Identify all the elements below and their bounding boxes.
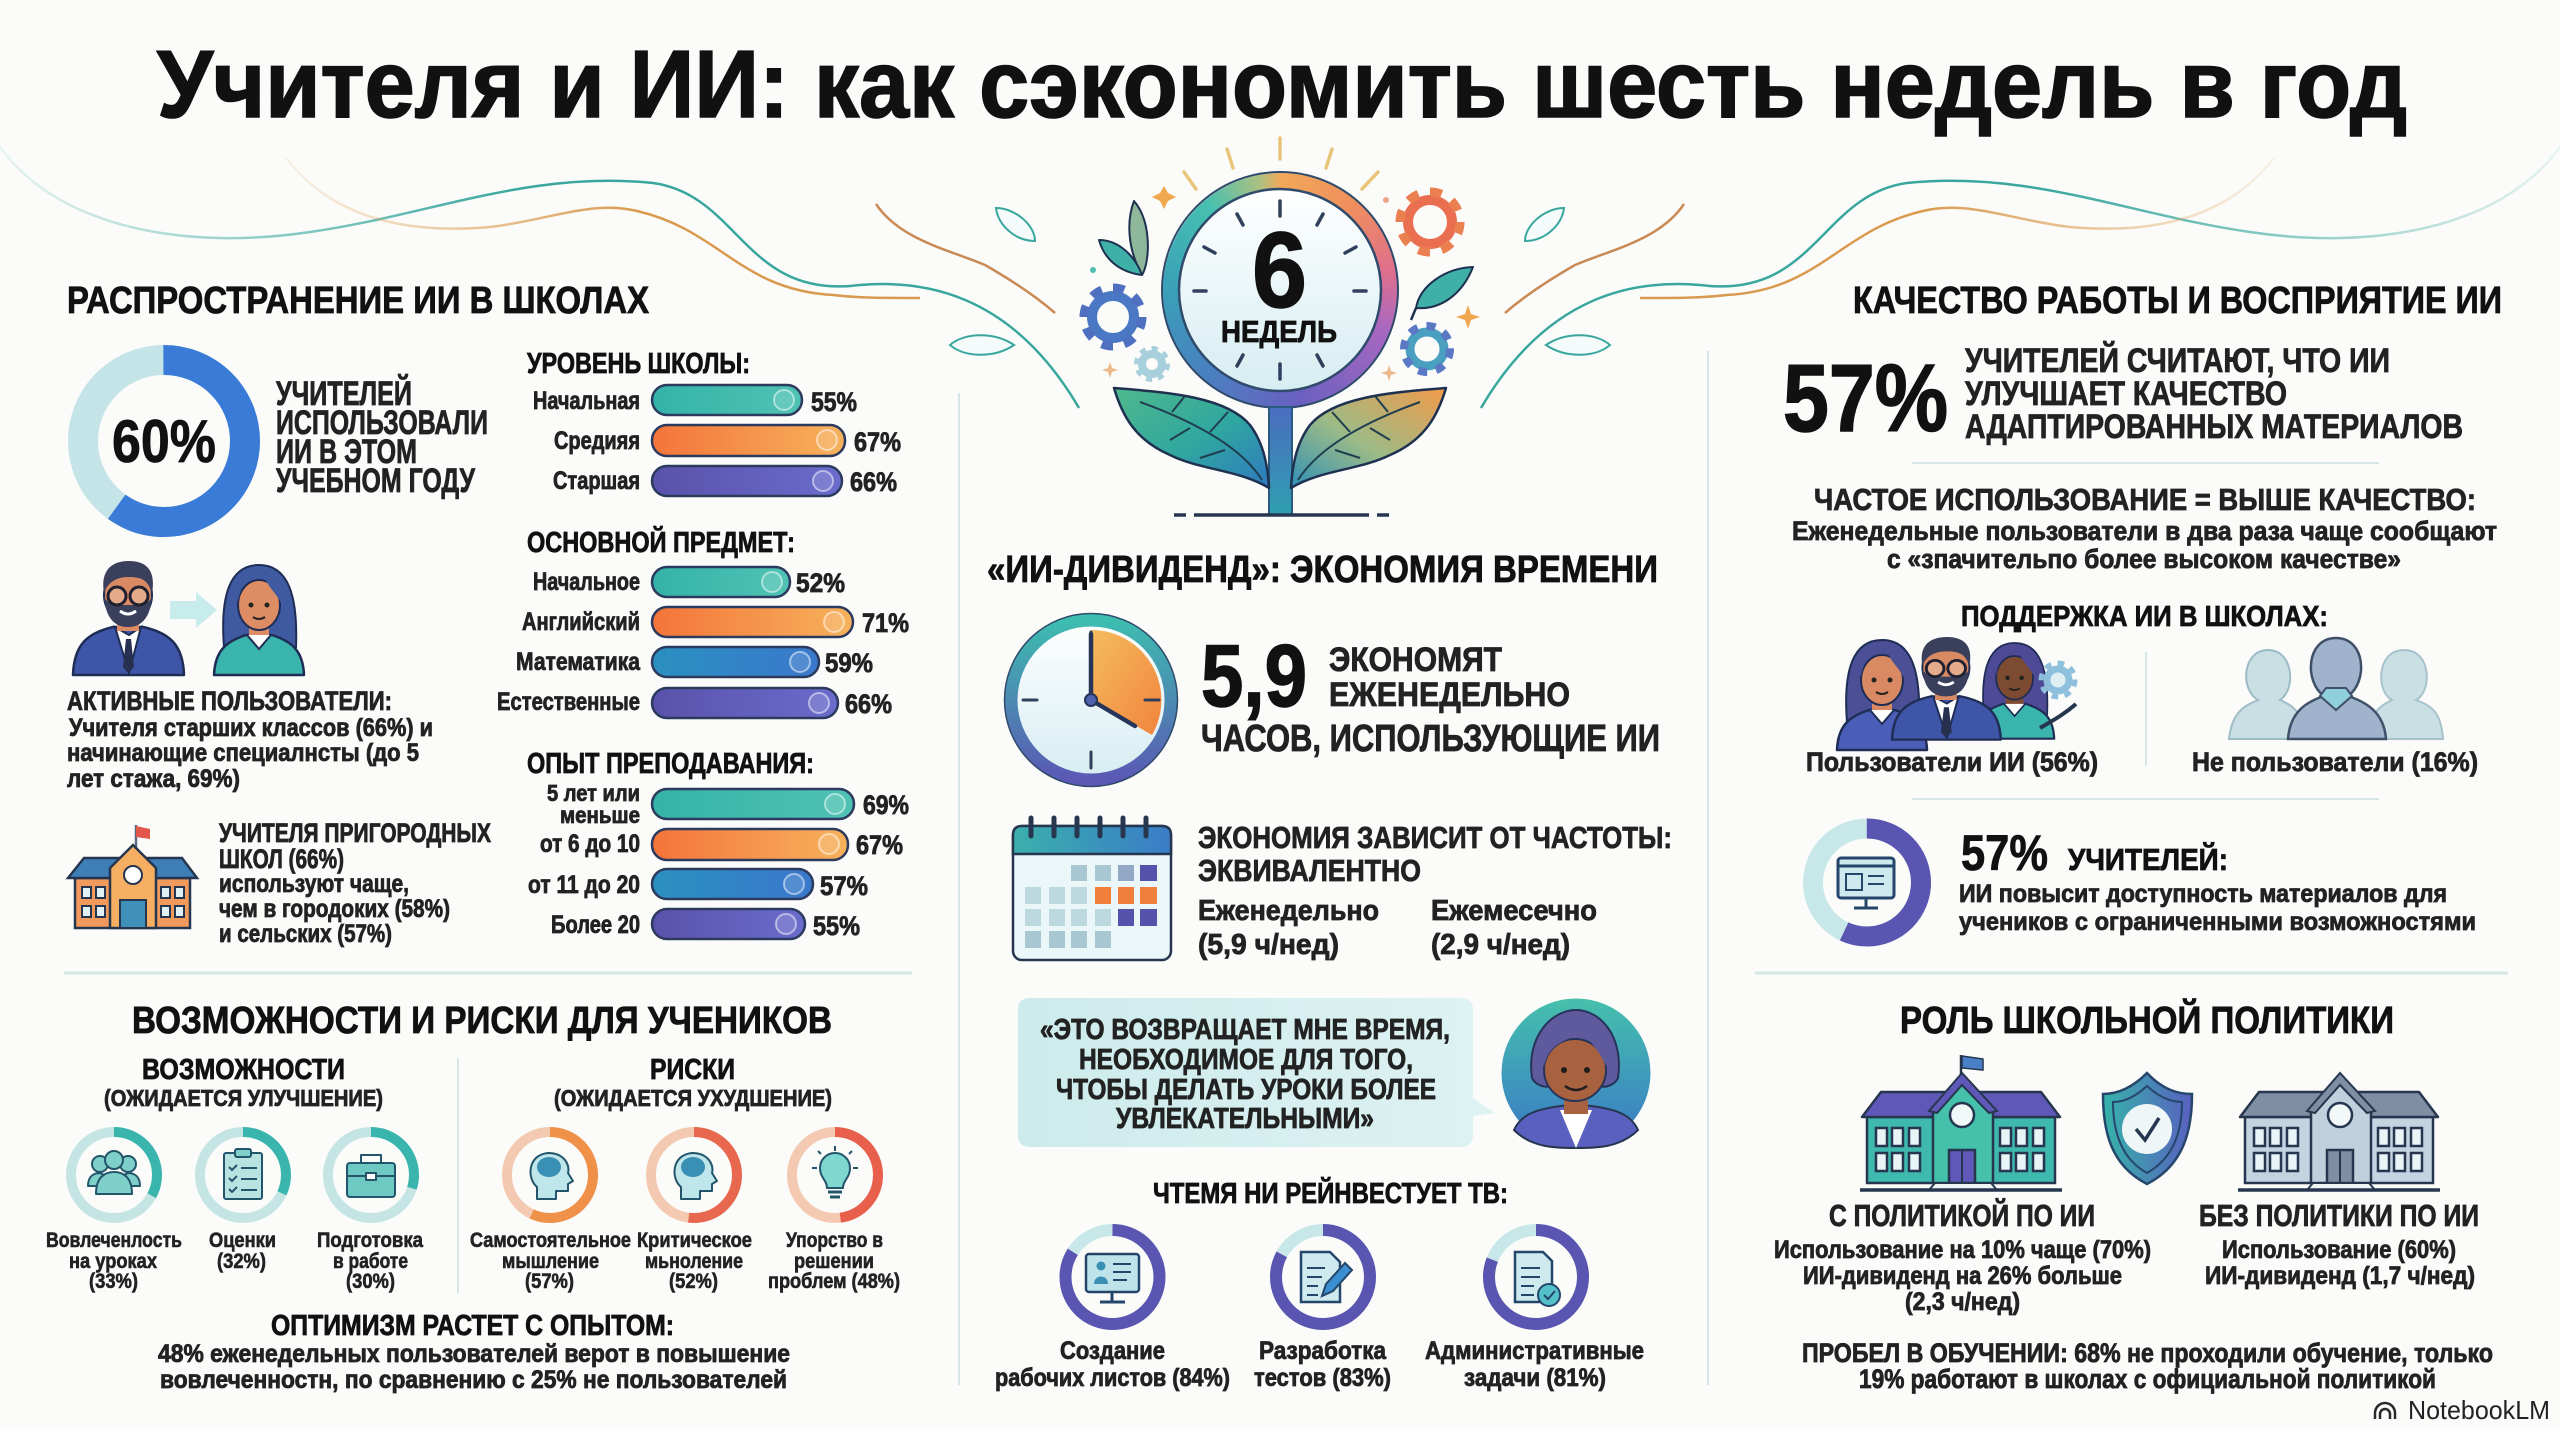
ring: упорство 48% [792,1132,878,1218]
text block: экономия зависит от частоты: ЭКВИВАЛЕНТНО [1198,853,1421,888]
heading: РОЛЬ ШКОЛЬНОЙ ПОЛИТИКИ [1900,997,2394,1042]
bar: начальное 52%: Начальное [533,568,640,596]
bar: средняя 67% [554,425,901,457]
panel: ИИ-дивиденд [987,549,1672,1392]
chart: уровень школы [527,348,901,497]
bar: математика 59%: 59% [825,648,873,678]
bar: средняя 67%: 67% [854,427,901,457]
clock ring [1163,173,1398,408]
text block: без политики [2199,1198,2479,1290]
callout: quote bubble [1018,998,1495,1147]
bar: старшая 66% [553,466,897,497]
panel: возможности и риски [46,1000,900,1394]
ring labels: тестов (83%) [1254,1364,1391,1392]
panel: качество работы и восприятие ИИ [1783,280,2502,936]
subheading: возможности [104,1054,383,1111]
icon labels: Пользователи ИИ (56%) [1806,747,2098,777]
ring labels: Критическое [637,1229,752,1252]
text block: без политики: БЕЗ ПОЛИТИКИ ПО ИИ [2199,1198,2479,1233]
callout: quote bubble: «ЭТО ВОЗВРАЩАЕТ МНЕ ВРЕМЯ, [1040,1014,1450,1046]
heading: РАСПРОСТРАНЕНИЕ ИИ В ШКОЛАХ [67,280,650,322]
bar: начальное 52% [533,567,845,598]
callout: quote bubble: УВЛЕКАТЕЛЬНЫМИ» [1116,1103,1374,1135]
subheading: риски: РИСКИ [650,1054,735,1086]
stat: 5,9 часов: ЧАСОВ, ИСПОЛЬЗУЮЩИЕ ИИ [1201,718,1660,760]
ring: критическое мышление 52% [651,1132,737,1218]
decorative waves left [0,147,1079,408]
chart: основной предмет: ОСНОВНОЙ ПРЕДМЕТ: [527,525,795,559]
heading: куда реинвестируют: ЧТЕМЯ НИ РЕЙНВЕСТУЕТ ТВ: [1153,1176,1508,1210]
ring: административные задачи 81% [1489,1230,1583,1324]
ring labels: Вовлеченлость [46,1229,182,1252]
ring labels: (32%) [217,1250,266,1273]
stat: 5,9 часов: ЭКОНОМЯТ [1329,641,1502,679]
bar: средняя 67%: Средияя [554,427,640,455]
text block: экономия зависит от частоты: (5,9 ч/нед) [1198,929,1339,961]
text block: экономия зависит от частоты: ЭКОНОМИЯ ЗАВИСИТ ОТ ЧАСТОТЫ: [1198,820,1672,855]
ring labels [46,1229,900,1293]
icon labels: Не пользователи (16%) [2192,747,2478,777]
icon: shield [2103,1073,2192,1184]
ring labels: (57%) [525,1270,574,1293]
ring labels [995,1337,1644,1392]
bar: старшая 66%: 66% [850,467,897,497]
ring: рабочие листы 84% [1066,1230,1160,1324]
text block: пригородные школы [219,818,491,948]
ring labels: в работе [333,1250,408,1273]
bar: от 6 до 10 67% [540,829,903,860]
text block: пробел в обучении [1802,1338,2493,1394]
heading: поддержка ИИ: ПОДДЕРЖКА ИИ В ШКОЛАХ: [1961,601,2328,633]
bar: начальная 55% [533,385,857,417]
icon: suburban school [68,825,197,928]
bar: от 11 до 20 57%: 57% [820,871,868,901]
subheading: возможности: (ОЖИДАЕТСЯ УЛУЧШЕНИЕ) [104,1085,383,1111]
bar: от 11 до 20 57% [528,869,868,901]
text block: экономия зависит от частоты: Еженедельно [1198,895,1379,927]
ring labels: на уроках [69,1250,157,1273]
ring labels: задачи (81%) [1464,1364,1606,1392]
ring labels: мышление [502,1250,599,1273]
stat: 5,9 часов [1201,626,1660,760]
text block: 57% учителей: УЧИТЕЛЕЙ: [2068,841,2228,877]
ring: доступность 57% [1813,828,1921,936]
bar: математика 59% [516,647,873,678]
text block: с политикой [1774,1197,2151,1316]
subheading: риски [554,1054,832,1111]
ring labels: мьноление [645,1250,743,1273]
text block: с политикой: ИИ-дивиденд на 26% больше [1803,1262,2122,1290]
text block: активные пользователи [67,686,433,793]
callout: quote bubble: ЧТОБЫ ДЕЛАТЬ УРОКИ БОЛЕЕ [1056,1074,1436,1106]
text block: 57% учителей: 57% [1961,825,2048,881]
text block: экономия зависит от частоты: (2,9 ч/нед) [1431,929,1570,961]
bar: 5 лет или меньше 69%: меньше [560,802,640,828]
text block: без политики: ИИ-дивиденд (1,7 ч/нед) [2205,1262,2475,1290]
ring labels: Административные [1425,1337,1644,1365]
text block: экономия зависит от частоты: Ежемесечно [1431,895,1597,927]
ring labels: проблем (48%) [768,1270,900,1293]
ring labels: Упорство в [786,1229,883,1252]
chart: уровень школы: УРОВЕНЬ ШКОЛЫ: [527,348,750,380]
bar: от 11 до 20 57%: от 11 до 20 [528,871,640,899]
ring: подготовка 30% [328,1132,414,1218]
text block: частое использование: Еженедельные пользователи в два раза чаще сообщают [1792,516,2497,546]
bar: начальная 55%: 55% [811,387,857,417]
bar: естественные 66% [497,688,892,719]
text block: активные пользователи: АКТИВНЫЕ ПОЛЬЗОВАТЕЛИ: [67,686,392,716]
stat caption [1965,341,2463,446]
text block: с политикой: С ПОЛИТИКОЙ ПО ИИ [1829,1197,2095,1233]
text block: частое использование [1792,482,2497,574]
ring labels: решении [794,1250,874,1273]
bar: начальное 52%: 52% [796,568,845,598]
bar: естественные 66%: 66% [845,689,892,719]
ring: тесты 83% [1276,1230,1370,1324]
logo: NotebookLM: NotebookLM [2408,1395,2550,1425]
bar: более 20 55%: Более 20 [551,911,640,939]
ring labels: Разработка [1259,1337,1387,1365]
bar: 5 лет или меньше 69% [547,780,909,828]
bar: более 20 55%: 55% [813,911,860,941]
text block: оптимизм растет: вовлеченностн, по сравнению с 25% не пользователей [160,1366,787,1394]
donut caption: УЧЕБНОМ ГОДУ [276,462,476,500]
ring: оценки 32% [200,1132,286,1218]
bar: английский 71%: 71% [862,608,909,638]
text block: частое использование: ЧАСТОЕ ИСПОЛЬЗОВАНИЕ = ВЫШЕ КАЧЕСТВО: [1814,482,2476,517]
icon: calendar [1013,818,1171,960]
text block: без политики: Использование (60%) [2222,1236,2456,1264]
donut caption: УЧИТЕЛЕЙ [276,374,412,413]
text block: 57% учителей: ИИ повысит доступность материалов для [1959,880,2447,908]
icon: clock face [1162,172,1398,408]
centerpiece: clock flower 6 недель [1084,138,1480,515]
stat caption: УЛУЧШАЕТ КАЧЕСТВО [1965,375,2287,413]
text block: пригородные школы: используют чаще, [219,870,409,898]
panel: роль школьной политики [1774,997,2493,1394]
icon: ai users [1837,637,2076,750]
donut 60%: 60% [112,408,216,475]
icon: stem and large leaves [1114,388,1446,515]
text block: пригородные школы: чем в городоких (58%) [219,895,450,923]
bar: от 6 до 10 67%: от 6 до 10 [540,830,640,858]
heading: ВОЗМОЖНОСТИ И РИСКИ ДЛЯ УЧЕНИКОВ [132,1000,832,1042]
bar: от 6 до 10 67%: 67% [856,830,903,860]
chart: опыт преподавания: ОПЫТ ПРЕПОДАВАНИЯ: [527,748,814,780]
bar: математика 59%: Математика [516,648,641,676]
decorative waves right [1481,147,2560,408]
bar: более 20 55% [551,909,860,941]
icon labels [1806,747,2478,777]
donut caption: ИСПОЛЬЗОВАЛИ [276,404,488,442]
title: Учителя и ИИ: как сэкономить шесть недель в год [157,31,2407,138]
text block: пригородные школы: УЧИТЕЛЯ ПРИГОРОДНЫХ [219,818,491,848]
donut 60% [83,360,245,522]
text block: пригородные школы: ШКОЛ (66%) [219,844,344,874]
ring labels: Подготовка [317,1229,423,1252]
text block: пробел в обучении: 19% работают в школах с официальной политикой [1859,1364,2436,1394]
ring: самостоятельное мышление 57% [507,1132,593,1218]
heading: «ИИ-ДИВИДЕНД»: ЭКОНОМИЯ ВРЕМЕНИ [987,549,1658,591]
bar: 5 лет или меньше 69%: 5 лет или [547,780,640,806]
bar: начальная 55%: Начальная [533,387,640,415]
text block: 57% учителей: учеников с ограниченными возможностями [1959,908,2476,936]
ring labels: Создание [1060,1337,1165,1365]
icon: teacher portrait [1502,998,1650,1148]
subheading: риски: (ОЖИДАЕТСЯ УХУДШЕНИЕ) [554,1085,832,1111]
icon: non-users [2229,638,2443,739]
bar: старшая 66%: Старшая [553,467,640,495]
bar: английский 71%: Английский [522,608,640,636]
icon: school without policy [2238,1073,2440,1190]
text block: с политикой: Использование на 10% чаще (70%) [1774,1236,2151,1264]
ring labels: (52%) [669,1270,718,1293]
panel: распространение ИИ в школах [67,280,909,948]
text block: экономия зависит от частоты [1198,820,1672,961]
donut caption: ИИ В ЭТОМ [276,433,417,471]
chart: основной предмет [497,525,909,719]
ring labels: рабочих листов (84%) [995,1364,1230,1392]
icon: teacher and young teacher with arrow [73,561,304,675]
bar: естественные 66%: Естественные [497,688,640,716]
ring labels: (33%) [89,1270,138,1293]
text block: пригородные школы: и сельских (57%) [219,920,392,948]
bar: 5 лет или меньше 69%: 69% [863,790,909,820]
ring labels: Самостоятельное [470,1229,631,1252]
icon: small leaves [1099,201,1473,320]
text block: оптимизм растет [158,1310,790,1394]
icon: school with policy [1860,1055,2062,1190]
chart: опыт преподавания [527,748,909,941]
text block: оптимизм растет: ОПТИМИЗМ РАСТЕТ С ОПЫТОМ: [271,1310,674,1342]
stat: 57%: 57% [1783,345,1948,452]
text block: активные пользователи: начинающие специалнсты (до 5 [67,739,419,767]
stat caption: УЧИТЕЛЕЙ СЧИТАЮТ, ЧТО ИИ [1965,341,2390,380]
text block: частое использование: с «зпачительпо более высоком качестве» [1887,544,2401,574]
ring labels: Оценки [209,1229,276,1252]
ring: вовлеченность 33% [71,1132,157,1218]
subheading: возможности: ВОЗМОЖНОСТИ [142,1054,345,1086]
icon: clock face: 6 [1252,209,1307,330]
stat: 5,9 часов: ЕЖЕНЕДЕЛЬНО [1329,676,1570,714]
donut caption [276,374,488,500]
text block: активные пользователи: Учителя старших классов (66%) и [69,714,433,742]
icon: gears [1084,192,1460,379]
stat: 5,9 часов: 5,9 [1201,626,1307,725]
stat caption: АДАПТИРОВАННЫХ МАТЕРИАЛОВ [1965,408,2463,446]
text block: 57% учителей [1959,825,2476,936]
bar: английский 71% [522,607,909,638]
icon: clock face: НЕДЕЛЬ [1221,314,1337,349]
callout: quote bubble: НЕОБХОДИМОЕ ДЛЯ ТОГО, [1079,1044,1413,1076]
text block: активные пользователи: лет стажа, 69%) [67,765,240,793]
ring labels: (30%) [346,1270,395,1293]
text block: с политикой: (2,3 ч/нед) [1905,1288,2020,1316]
icon: clock 5.9 hours [1004,614,1178,786]
text block: оптимизм растет: 48% еженедельных пользователей верот в повышение [158,1340,790,1368]
